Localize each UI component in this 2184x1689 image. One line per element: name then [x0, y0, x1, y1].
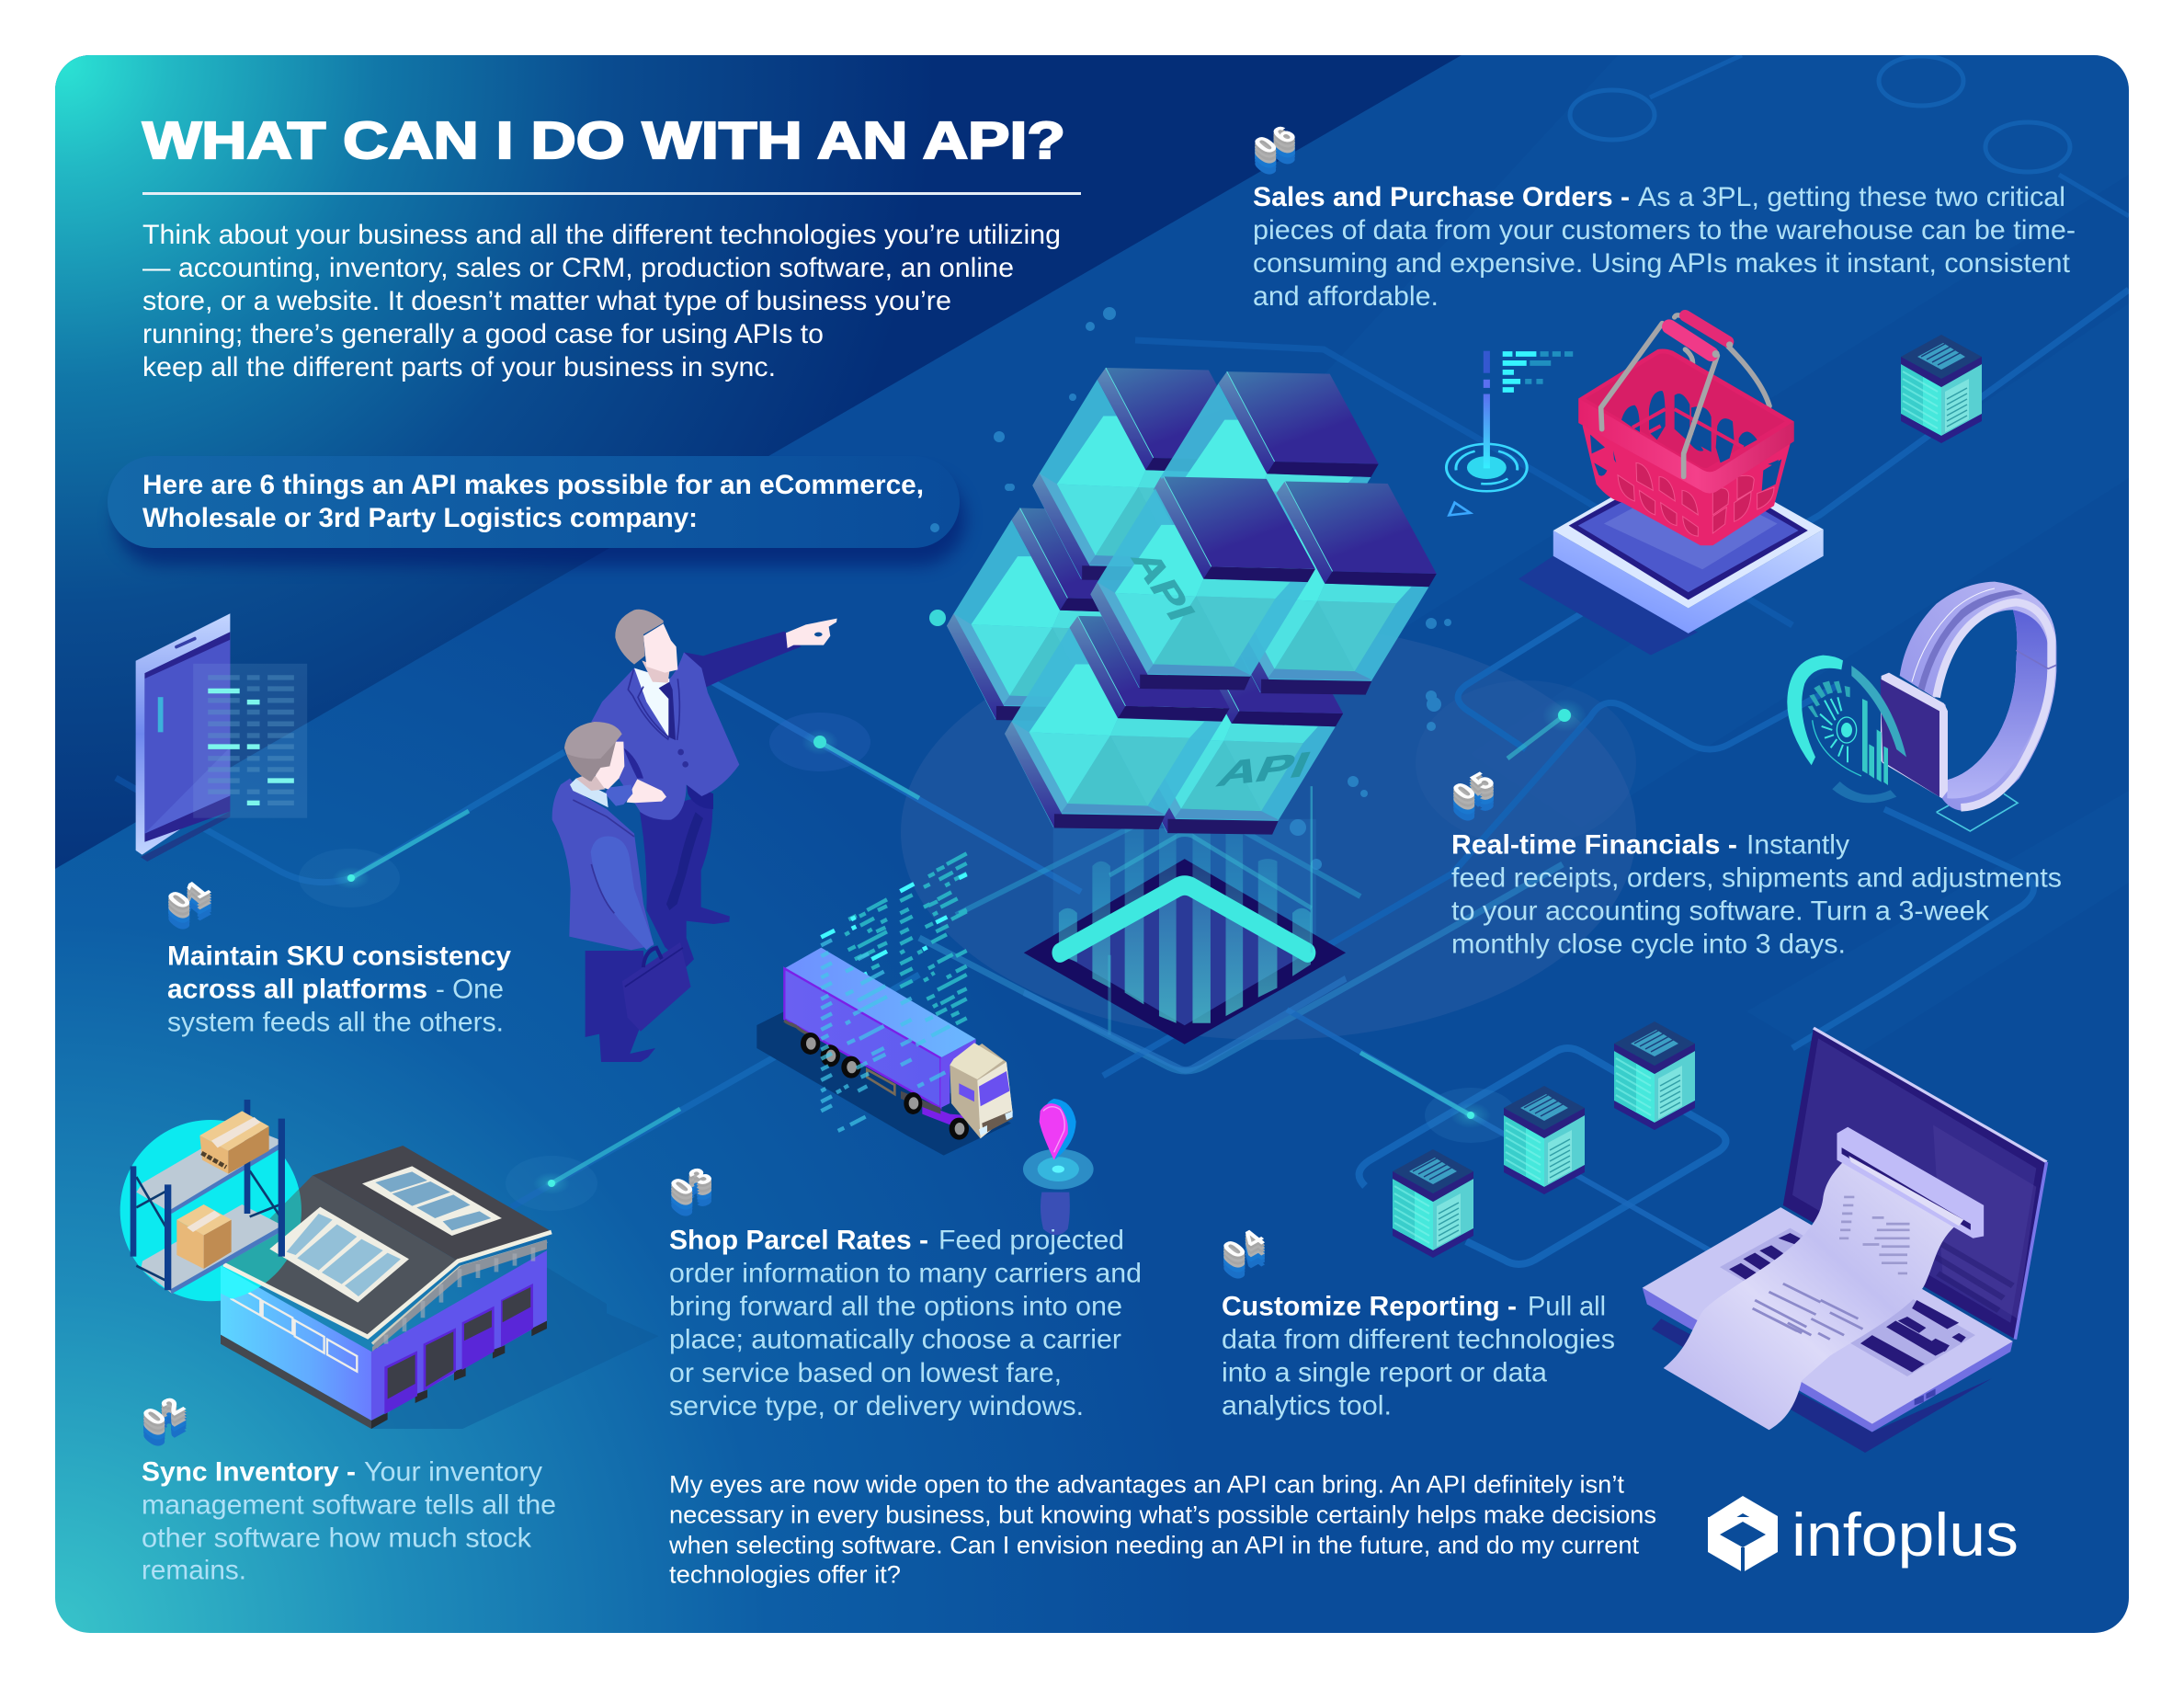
- text block: 01 maintain SKU consistency: - One: [436, 975, 504, 1004]
- text block: 04 customize reporting: Customize Reporting -: [1222, 1291, 1517, 1322]
- text block: closing paragraph: necessary in every business, but knowing what’s possible certainly helps make decisions: [669, 1501, 1656, 1528]
- text block: 03 shop parcel rates: or service based on lowest fare,: [669, 1358, 1062, 1388]
- man: pointing: [591, 610, 837, 967]
- server: top of row: [1614, 1021, 1695, 1130]
- icon: number 02: 02: [136, 1390, 197, 1430]
- text block: 06 sales and purchase orders: [1253, 182, 2076, 312]
- briefcase: [622, 942, 690, 1032]
- text block: 03 shop parcel rates: order information to many carriers and: [669, 1258, 1142, 1289]
- server: middle of row: [1504, 1086, 1585, 1194]
- illustration: shopping basket: [1578, 315, 1794, 545]
- cube: mid left: [1090, 476, 1315, 690]
- heading: title: WHAT CAN I DO WITH AN API?: [142, 111, 1065, 170]
- cube: mid right: [1211, 481, 1437, 695]
- text block: 04 customize reporting: analytics tool.: [1222, 1390, 1392, 1421]
- text block: 02 sync inventory: [142, 1456, 556, 1585]
- text block: 01 maintain SKU consistency: Maintain SKU consistency: [167, 942, 512, 971]
- icon: location pin: [1023, 1099, 1094, 1235]
- illustration: signal beacon: [1446, 351, 1573, 515]
- title rule: [142, 192, 1081, 195]
- text block: 06 sales and purchase orders: As a 3PL, getting these two critical: [1638, 182, 2065, 212]
- text block: closing paragraph: My eyes are now wide open to the advantages an API can bring. An API definitely isn’t: [669, 1471, 1624, 1499]
- callout: six things pill: [108, 456, 965, 565]
- data stream behind truck: [845, 853, 967, 1023]
- cube: back left: [1032, 368, 1257, 581]
- logo: infoplus: [1708, 1496, 2019, 1574]
- text block: intro: — accounting, inventory, sales or CRM, production software, an online: [142, 253, 1014, 283]
- label: API on left cube face: API: [1122, 547, 1203, 624]
- illustration: smart watch with HUD: [1787, 582, 2056, 831]
- text block: 05 real-time financials: Real-time Financials -: [1451, 829, 1737, 861]
- text block: 03 shop parcel rates: service type, or delivery windows.: [669, 1391, 1084, 1421]
- text block: 03 shop parcel rates: Feed projected: [938, 1225, 1124, 1256]
- icon: number 05: 05: [1446, 765, 1507, 805]
- text block: 06 sales and purchase orders: and affordable.: [1253, 281, 1439, 312]
- text block: closing paragraph: when selecting software. Can I envision needing an API in the future, and do my current: [668, 1532, 1639, 1559]
- text block: intro: keep all the different parts of your business in sync.: [142, 352, 776, 382]
- text block: 01 maintain SKU consistency: [167, 942, 512, 1037]
- text block: 05 real-time financials: to your accounting software. Turn a 3-week: [1451, 896, 1989, 927]
- icon: number 06: 06: [1247, 119, 1308, 158]
- text block: 02 sync inventory: management software tells all the: [142, 1489, 556, 1521]
- text block: 04 customize reporting: Pull all: [1528, 1291, 1606, 1322]
- text block: 06 sales and purchase orders: consuming and expensive. Using APIs makes it instant, consistent: [1253, 248, 2070, 279]
- text block: closing paragraph: technologies offer it?: [669, 1561, 901, 1589]
- illustration: delivery truck with data streams: [756, 853, 1013, 1156]
- text block: closing paragraph: [668, 1471, 1656, 1589]
- text block: intro: Think about your business and all the different technologies you’re utilizing: [142, 220, 1061, 250]
- connector nodes with glow: [299, 699, 1587, 1211]
- text block: 02 sync inventory: Sync Inventory -: [142, 1456, 356, 1488]
- server: bottom of row: [1393, 1149, 1473, 1258]
- illustration: warehouse with shelving: [120, 1100, 659, 1429]
- man: with briefcase: [552, 722, 666, 1062]
- dot: teal marker: [929, 610, 946, 626]
- cube: left low: [947, 508, 1172, 722]
- illustration: laptop printing report: [1643, 1028, 2047, 1453]
- text block: 05 real-time financials: monthly close cycle into 3 days.: [1451, 929, 1846, 960]
- illustration: two businessmen: [552, 610, 837, 1062]
- text block: 05 real-time financials: [1451, 829, 2062, 960]
- icon: number 04: 04: [1216, 1223, 1277, 1262]
- label: API on bottom cube face: API: [1211, 745, 1316, 793]
- cube: bottom right: [1119, 622, 1343, 835]
- callout: six things pill: Wholesale or 3rd Party Logistics company:: [142, 503, 698, 533]
- server: near basket: [1901, 335, 1982, 443]
- icon: number 01: 01: [161, 873, 222, 913]
- callout: six things pill: Here are 6 things an API makes possible for an eCommerce,: [142, 470, 924, 500]
- text block: 04 customize reporting: [1222, 1291, 1615, 1421]
- text block: 02 sync inventory: Your inventory: [364, 1456, 542, 1488]
- text block: intro: store, or a website. It doesn’t matter what type of business you’re: [142, 286, 951, 316]
- text block: 02 sync inventory: remains.: [142, 1556, 246, 1585]
- illustration: API cube platform: [947, 368, 1437, 1070]
- text block: 05 real-time financials: Instantly: [1746, 829, 1849, 861]
- shelving: [131, 1100, 285, 1294]
- decorative dots around cubes: [930, 307, 1451, 870]
- text block: 01 maintain SKU consistency: system feeds all the others.: [167, 1008, 504, 1037]
- illustration: platform under basket: [1519, 453, 1824, 656]
- data stream overlay: [821, 940, 950, 1131]
- text block: 03 shop parcel rates: [669, 1225, 1142, 1421]
- text block: intro: [142, 220, 1061, 382]
- logo: infoplus: infoplus: [1792, 1501, 2019, 1569]
- text block: 03 shop parcel rates: place; automatically choose a carrier: [669, 1324, 1121, 1355]
- text block: intro: running; there’s generally a good case for using APIs to: [142, 319, 824, 349]
- text block: 04 customize reporting: data from different technologies: [1222, 1324, 1615, 1355]
- illustration: phone with data overlay: [136, 613, 307, 862]
- text block: 03 shop parcel rates: bring forward all the options into one: [669, 1291, 1122, 1322]
- text block: 02 sync inventory: other software how much stock: [142, 1523, 531, 1554]
- text block: 04 customize reporting: into a single report or data: [1222, 1357, 1548, 1388]
- text block: 06 sales and purchase orders: pieces of data from your customers to the warehouse can be time-: [1253, 215, 2076, 245]
- text block: 01 maintain SKU consistency: across all platforms: [167, 975, 427, 1004]
- cube: bottom left: [1005, 616, 1230, 829]
- text block: 05 real-time financials: feed receipts, orders, shipments and adjustments: [1451, 862, 2062, 894]
- icon: number 03: 03: [664, 1160, 724, 1200]
- text block: 03 shop parcel rates: Shop Parcel Rates -: [669, 1225, 928, 1256]
- text block: 06 sales and purchase orders: Sales and Purchase Orders -: [1253, 182, 1630, 212]
- cube: back right: [1154, 371, 1379, 585]
